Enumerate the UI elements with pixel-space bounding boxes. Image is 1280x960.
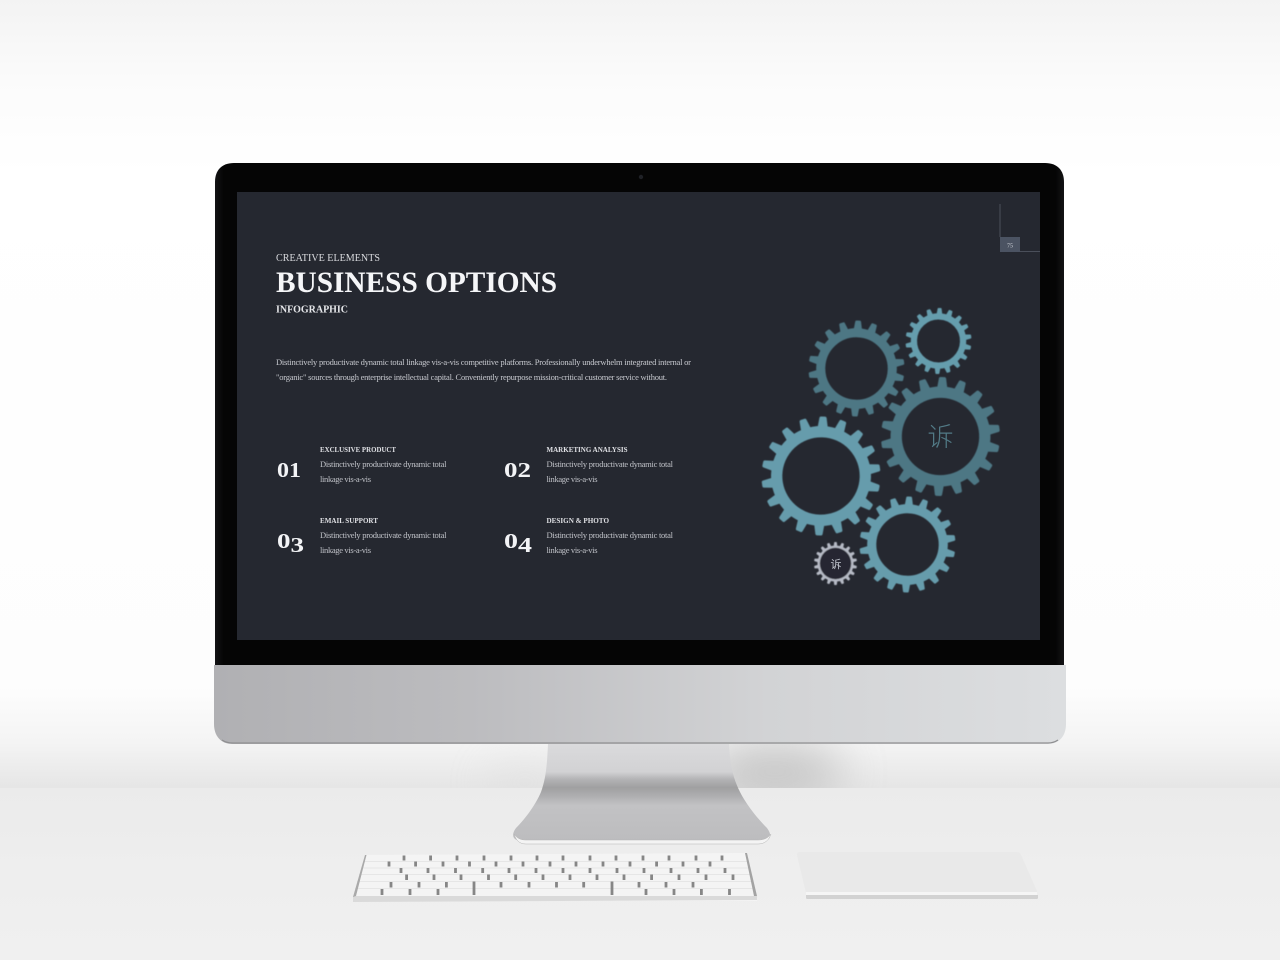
- gear glyph: small: 诉: [830, 556, 842, 572]
- monitor stand: [513, 744, 771, 844]
- item 01: EXCLUSIVE PRODUCT: [320, 445, 396, 454]
- screen: [237, 192, 1040, 640]
- gear: left: [759, 414, 883, 538]
- item 04: DESIGN & PHOTO: [546, 516, 609, 525]
- item 03: 0: [277, 529, 288, 553]
- item 03: [277, 516, 447, 557]
- monitor chin: [214, 665, 1066, 744]
- item 02: linkage vis-a-vis: [546, 474, 598, 484]
- monitor bezel: [215, 163, 1064, 665]
- gear: top right: [904, 307, 973, 375]
- gear glyph: large: 诉: [927, 417, 954, 454]
- gear: centre right: [879, 375, 1002, 498]
- gear: bottom: [858, 495, 957, 594]
- intro paragraph: Distinctively productivate dynamic total linkage vis-a-vis competitive platforms. Professionally underwhelm integrated internal or: [276, 357, 691, 367]
- item 04: [504, 516, 674, 557]
- item 03: Distinctively productivate dynamic total: [320, 530, 447, 540]
- item 02: Distinctively productivate dynamic total: [546, 459, 674, 469]
- intro paragraph: "organic" sources through enterprise intellectual capital. Conveniently repurpose mission-critical customer service without.: [276, 372, 667, 382]
- monitor: [214, 163, 1066, 844]
- item 02: [504, 445, 674, 484]
- item 04: Distinctively productivate dynamic total: [546, 530, 674, 540]
- trackpad: [797, 852, 1038, 899]
- subtitle: INFOGRAPHIC: [276, 304, 348, 316]
- desk surface: [0, 788, 1280, 960]
- item 04: linkage vis-a-vis: [546, 545, 598, 555]
- keyboard key gaps: [382, 856, 733, 895]
- item 03: 3: [290, 533, 304, 557]
- heading block: [276, 252, 557, 316]
- eyebrow: CREATIVE ELEMENTS: [276, 252, 380, 264]
- page marker: [1000, 204, 1040, 252]
- gear: top left: [807, 319, 906, 418]
- item 01: linkage vis-a-vis: [320, 474, 371, 484]
- item 03: linkage vis-a-vis: [320, 545, 371, 555]
- gear: small grey: [814, 542, 857, 585]
- item 02: MARKETING ANALYSIS: [546, 445, 628, 454]
- item 03: EMAIL SUPPORT: [320, 516, 378, 525]
- page marker: 75: [1007, 244, 1013, 250]
- webcam: [639, 175, 643, 179]
- item 01: 01: [277, 458, 301, 482]
- item 02: 02: [504, 458, 531, 482]
- keyboard: [353, 853, 757, 902]
- item 04: 4: [518, 533, 533, 557]
- gear cluster: [759, 307, 1002, 594]
- stand shadow on wall: [729, 744, 850, 788]
- item 04: 0: [504, 529, 514, 553]
- intro paragraph: [276, 357, 691, 382]
- item 01: [277, 445, 447, 484]
- title: BUSINESS OPTIONS: [276, 266, 557, 299]
- item 01: Distinctively productivate dynamic total: [320, 459, 447, 469]
